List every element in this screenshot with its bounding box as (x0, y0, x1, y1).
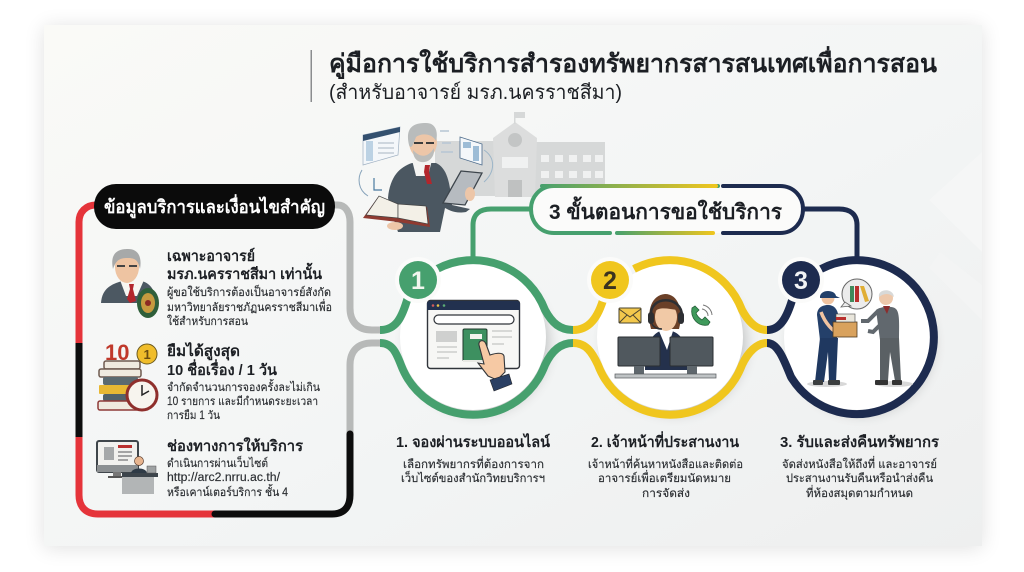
illustration: university building (435, 112, 605, 197)
heading: three steps pill (473, 184, 857, 258)
subtitle: (สำหรับอาจารย์ มรภ.นครราชสีมา) (329, 81, 622, 104)
text block: borrowing limit: 10 รายการ และมีกำหนดระยะเวลา (167, 395, 318, 408)
text block: borrowing limit: การยืม 1 วัน (167, 409, 220, 422)
step 1 circle (380, 257, 573, 415)
text block: service channels (167, 437, 304, 499)
badge 3 (778, 257, 824, 303)
panel heading: service information: ข้อมูลบริการและเงื่อนไขสำคัญ (104, 194, 325, 219)
text block: step 1: เลือกทรัพยากรที่ต้องการจาก (403, 456, 544, 471)
icon: stacked books, badge and clock (98, 340, 157, 410)
text block: lecturers only: เฉพาะอาจารย์ (167, 247, 255, 265)
text block: step 3: ประสานงานรับคืนหรือนำส่งคืน (786, 472, 933, 485)
text block: step 1 (396, 432, 551, 485)
text block: step 3: 3. รับและส่งคืนทรัพยากร (780, 434, 940, 451)
icon: browser with book and pointing hand (427, 300, 520, 391)
title: คู่มือการใช้บริการสำรองทรัพยากรสารสนเทศเพื่อการสอน (329, 46, 937, 80)
text block: step 1: 1. จองผ่านระบบออนไลน์ (396, 432, 551, 451)
text block: borrowing limit: จำกัดจำนวนการจองครั้งละไม่เกิน (167, 379, 320, 394)
text block: service channels: หรือเคาน์เตอร์บริการ ชั้น 4 (167, 484, 289, 499)
text block: step 2 (588, 431, 743, 500)
badge 1: 1 (411, 267, 425, 295)
text block: step 2: 2. เจ้าหน้าที่ประสานงาน (591, 431, 740, 451)
step 2 circle (573, 257, 767, 415)
text block: borrowing limit: ยืมได้สูงสุด (167, 341, 240, 361)
panel: service information frame (79, 205, 385, 514)
heading: three steps pill: 3 ขั้นตอนการขอใช้บริการ (549, 196, 783, 224)
text block: lecturers only: ผู้ขอใช้บริการต้องเป็นอาจารย์สังกัด (167, 284, 331, 299)
text block: service channels: ช่องทางการให้บริการ (167, 437, 304, 455)
icon: stacked books, badge and clock: 1 (144, 347, 151, 362)
icon: stacked books, badge and clock: 10 (105, 340, 129, 365)
badge 3: 3 (794, 267, 808, 295)
text block: lecturers only: มหาวิทยาลัยราชภัฏนครราชสีมาเพื่อ (167, 299, 332, 314)
badge 2 (587, 257, 633, 303)
text block: step 2: การจัดส่ง (642, 488, 690, 500)
text block: lecturers only: มรภ.นครราชสีมา เท่านั้น (167, 262, 323, 283)
icon: staff with headset, monitors, mail and phone (615, 294, 716, 378)
text block: step 3: ที่ห้องสมุดตามกำหนด (806, 485, 913, 500)
step 3 circle (767, 257, 934, 414)
text block: step 3: จัดส่งหนังสือให้ถึงที่ และอาจารย์ (782, 456, 937, 471)
text block: step 2: อาจารย์เพื่อเตรียมนัดหมาย (598, 470, 731, 485)
text block: step 1: เว็บไซต์ของสำนักวิทยบริการฯ (401, 470, 545, 485)
text block: service channels: http://arc2.nrru.ac.th/ (167, 472, 281, 484)
icon: lecturer with university seal (101, 249, 159, 318)
text block: borrowing limit (167, 341, 320, 422)
panel heading: service information (94, 184, 335, 229)
text block: borrowing limit: 10 ชื่อเรื่อง / 1 วัน (167, 359, 278, 379)
text block: lecturers only (167, 247, 332, 328)
icon: delivery person handing box to lecturer (807, 279, 913, 387)
icon: computer at service counter (97, 441, 158, 494)
illustration: professor with book and tablet (359, 123, 493, 232)
text block: lecturers only: ใช้สำหรับการสอน (167, 315, 248, 328)
text block: step 3 (780, 434, 940, 500)
badge 1 (395, 257, 441, 303)
text block: step 2: เจ้าหน้าที่ค้นหาหนังสือและติดต่อ (588, 456, 743, 471)
badge 2: 2 (603, 267, 617, 295)
text block: service channels: ดำเนินการผ่านเว็บไซต์ (167, 455, 268, 470)
